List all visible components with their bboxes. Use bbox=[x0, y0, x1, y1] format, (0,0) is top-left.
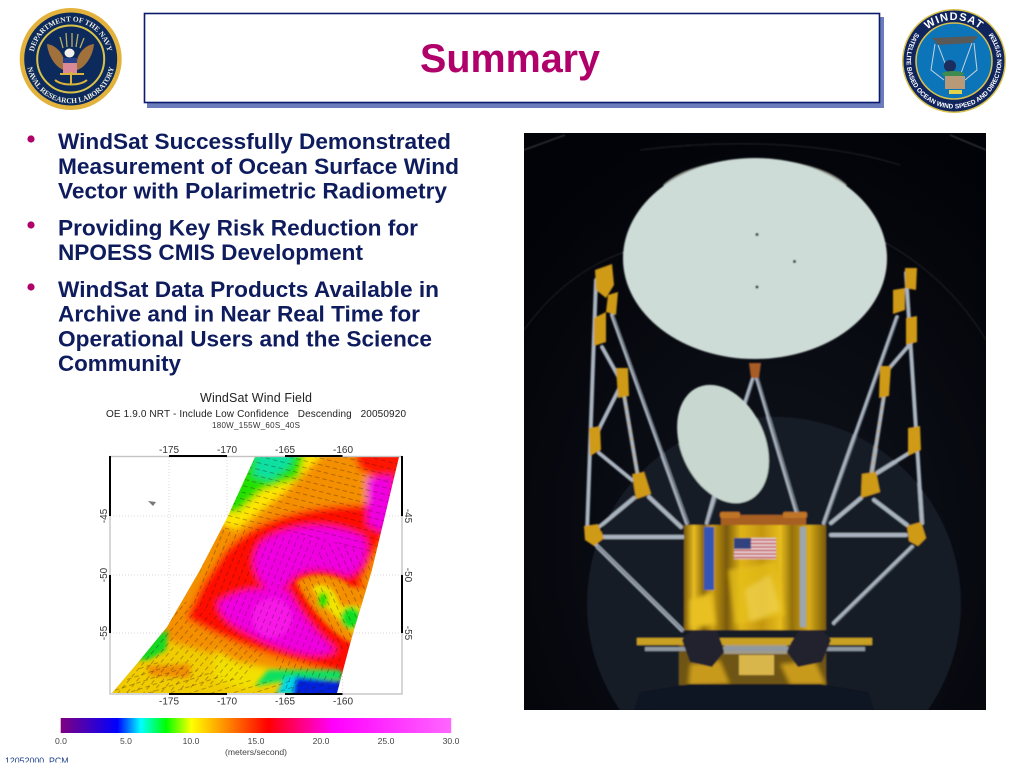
bullet 3: Archive and in Near Real Time for bbox=[58, 302, 420, 327]
bullet 3 bbox=[27, 277, 439, 376]
wind arrows bbox=[114, 457, 399, 693]
wind speed swath bbox=[112, 457, 399, 693]
pocket bbox=[294, 572, 367, 646]
main reflector dish bbox=[623, 158, 887, 359]
dark thermal bags bbox=[682, 630, 724, 667]
axis labels bbox=[99, 445, 413, 708]
support cloth bbox=[634, 684, 874, 710]
yellow and green top bbox=[222, 457, 326, 534]
bullet 3: WindSat Data Products Available in bbox=[58, 277, 439, 302]
axis labels: -50 bbox=[99, 567, 110, 582]
colour scale legend: (meters/second) bbox=[225, 747, 287, 757]
icon: eagle and shield bbox=[47, 33, 94, 85]
bullet 2: Providing Key Risk Reduction for bbox=[58, 216, 418, 241]
logo: Naval Research Laboratory seal bbox=[20, 8, 122, 110]
bullet 1: Measurement of Ocean Surface Wind bbox=[58, 154, 459, 179]
axis labels: -55 bbox=[99, 625, 110, 640]
magenta lower bbox=[218, 589, 336, 655]
axis labels: -55 bbox=[402, 626, 413, 641]
chart title: WindSat Wind Field bbox=[200, 391, 312, 405]
bullet 2: NPOESS CMIS Development bbox=[58, 240, 363, 265]
bullet 3: Community bbox=[58, 351, 181, 376]
axis labels: -165 bbox=[275, 445, 295, 456]
logo: WindSat seal: WINDSAT bbox=[923, 12, 984, 28]
gold joints bbox=[584, 264, 926, 546]
axis labels: -175 bbox=[159, 445, 179, 456]
platform deck bbox=[637, 638, 872, 645]
colour scale legend bbox=[55, 718, 460, 757]
colour scale legend: 10.0 bbox=[183, 736, 200, 746]
icon: satellite in seal bbox=[931, 36, 978, 94]
small feed reflector bbox=[676, 384, 770, 504]
colour scale legend: 25.0 bbox=[378, 736, 395, 746]
red band bbox=[186, 480, 402, 700]
truss struts bbox=[587, 273, 922, 631]
bullet 1 bbox=[27, 129, 459, 204]
title panel bbox=[144, 14, 884, 108]
colour scale legend: 0.0 bbox=[55, 736, 67, 746]
footer code, clipped at bottom bbox=[0, 756, 80, 768]
axis labels: -160 bbox=[333, 696, 353, 708]
colour scale legend: 30.0 bbox=[443, 736, 460, 746]
bullet 1: WindSat Successfully Demonstrated bbox=[58, 129, 451, 154]
axis labels: -170 bbox=[217, 696, 237, 708]
bullet 3: Operational Users and the Science bbox=[58, 327, 432, 352]
axis labels: -165 bbox=[275, 696, 295, 708]
logo: Naval Research Laboratory seal: DEPARTMENT OF THE NAVY bbox=[29, 16, 112, 52]
magenta upper bbox=[254, 526, 367, 590]
small wind arrow mark bbox=[148, 501, 156, 506]
colour scale legend: 5.0 bbox=[120, 736, 132, 746]
US flag bbox=[734, 538, 776, 559]
chart region label: 180W_155W_60S_40S bbox=[212, 421, 300, 430]
map frame bbox=[110, 456, 402, 694]
satellite body bbox=[637, 512, 872, 686]
axis labels: -160 bbox=[333, 445, 353, 456]
logo: WindSat seal: SATELLITE BASED OCEAN WIND SPEED AND DIRECTION SYSTEM bbox=[906, 32, 1002, 108]
chart: WindSat wind field map bbox=[55, 391, 460, 757]
axis labels: -45 bbox=[402, 509, 413, 524]
bullet 2 bbox=[27, 216, 418, 265]
axis labels: -175 bbox=[159, 696, 179, 708]
chamber backdrop disc bbox=[587, 417, 961, 710]
footer code, clipped at bottom: 12052000_PCM. bbox=[5, 756, 71, 766]
bullet 1: Vector with Polarimetric Radiometry bbox=[58, 178, 447, 204]
logo: Naval Research Laboratory seal: NAVAL RESEARCH LABORATORY bbox=[27, 66, 114, 104]
heading: Summary: Summary bbox=[420, 37, 600, 81]
blue panel bbox=[704, 527, 714, 590]
axis labels: -170 bbox=[217, 445, 237, 456]
white stripe bbox=[800, 527, 806, 627]
chart subtitle: OE 1.9.0 NRT - Include Low Confidence Descending 20050920 bbox=[106, 409, 406, 420]
axis labels: -50 bbox=[402, 568, 413, 583]
axis labels: -45 bbox=[99, 508, 110, 523]
orange right edge bbox=[354, 526, 382, 588]
colour scale legend: 15.0 bbox=[248, 736, 265, 746]
photo: WindSat satellite in test chamber bbox=[524, 133, 986, 710]
lower patches bbox=[147, 664, 190, 678]
lower bus bbox=[679, 645, 826, 685]
yellow lower area bbox=[112, 638, 340, 693]
colour scale legend: 20.0 bbox=[313, 736, 330, 746]
bullet list bbox=[27, 129, 459, 376]
